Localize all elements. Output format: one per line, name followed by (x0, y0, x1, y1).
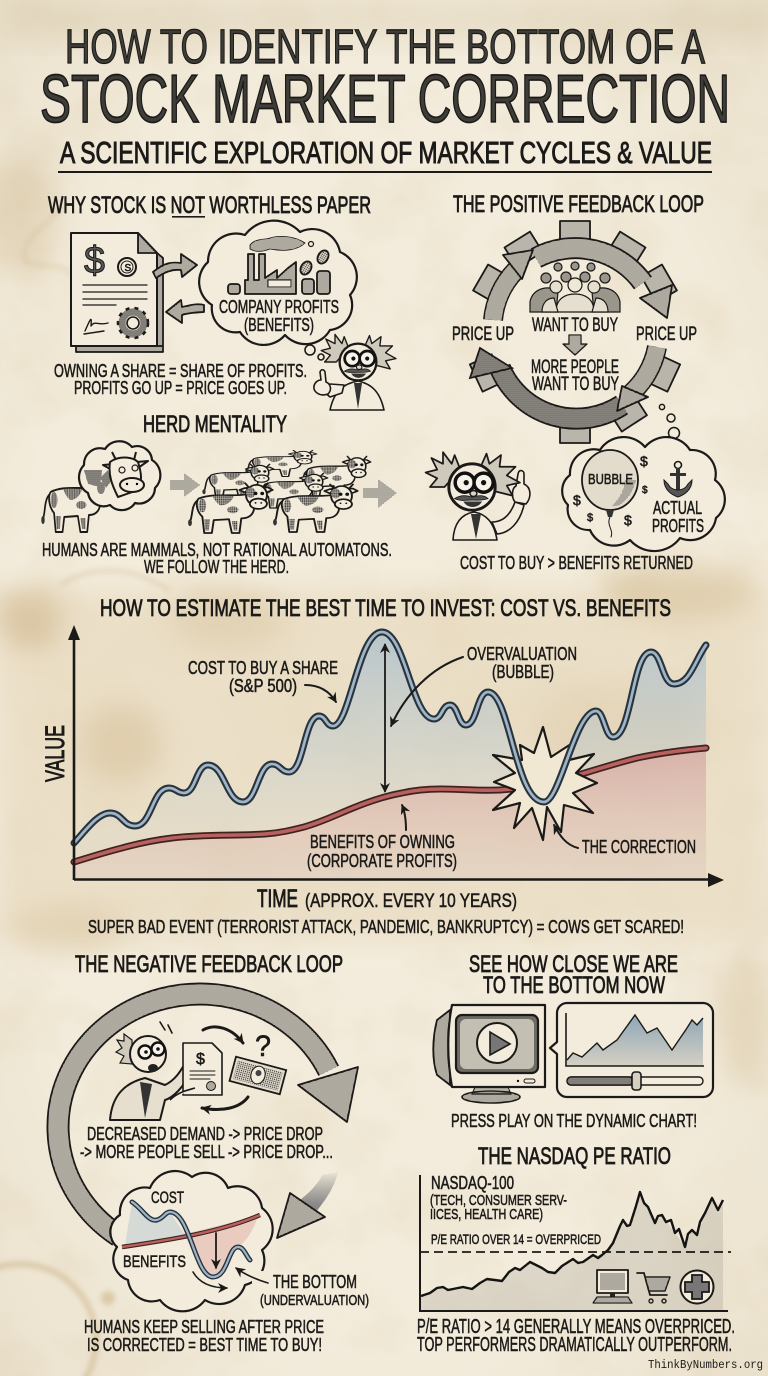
callout: benefits of owning: (CORPORATE PROFITS) (307, 851, 457, 871)
chart axes (420, 1175, 728, 1311)
big loop arrow (58, 994, 358, 1236)
icon: stock certificate: S (124, 263, 132, 274)
cloud: the bottom chart (110, 1171, 273, 1311)
chart labels: (TECH, CONSUMER SERV- (430, 1192, 567, 1209)
callout: the bottom: (UNDERVALUATION) (260, 1292, 369, 1309)
heading: HERD MENTALITY (143, 411, 287, 438)
dollar signs: $ (640, 453, 648, 469)
label: more people want to buy: WANT TO BUY (532, 374, 619, 395)
callout: cost to buy: (S&P 500) (229, 676, 297, 696)
icon: medical cross (680, 1270, 714, 1304)
dollar signs: $ (573, 492, 581, 508)
label: benefits: BENEFITS (123, 1252, 186, 1271)
axis label: time (257, 885, 517, 913)
chart labels: P/E RATIO OVER 14 = OVERPRICED (431, 1231, 601, 1247)
thought bubbles (659, 404, 680, 438)
callout: overvaluation (391, 644, 577, 726)
label: want to buy: WANT TO BUY (532, 315, 618, 336)
icon: worried scientist with certificate (110, 1022, 222, 1120)
dollar signs: $ (587, 512, 593, 524)
dollar signs: $ (624, 512, 632, 528)
label (219, 296, 339, 335)
mini line: cost (132, 1202, 250, 1277)
dollar signs: $ (642, 485, 648, 496)
icon: shopping cart (637, 1273, 670, 1303)
callout: benefits of owning (307, 805, 457, 871)
icon: monitor with play button (433, 1005, 545, 1103)
label: more people want to buy (531, 357, 619, 395)
label: actual profits: ACTUAL (653, 498, 702, 518)
label: actual profits (652, 498, 704, 536)
panel: cost vs benefits chart (40, 595, 724, 937)
text block: keep selling: HUMANS KEEP SELLING AFTER PRICE (84, 1317, 324, 1337)
line: pe ratio (421, 1192, 723, 1296)
callout: overvaluation: OVERVALUATION (467, 644, 577, 664)
text block: decreased demand: DECREASED DEMAND -> PRICE DROP (87, 1124, 323, 1144)
heading: SEE HOW CLOSE WE ARE (469, 951, 678, 978)
callout: the correction: THE CORRECTION (582, 837, 696, 857)
callout: the bottom (236, 1268, 370, 1309)
line: cost to buy (74, 632, 706, 843)
callout: cost to buy: COST TO BUY A SHARE (188, 658, 338, 678)
arrow: dollar back (202, 1097, 248, 1110)
text block (42, 540, 392, 577)
icon: dollar bill (230, 1057, 286, 1094)
dollar signs (573, 453, 648, 528)
panel: herd mentality (41, 411, 397, 577)
line: benefits (74, 748, 706, 862)
axis label: time: TIME (257, 885, 298, 913)
area: benefits fill (74, 748, 706, 880)
callout: overvaluation: (BUBBLE) (492, 662, 554, 682)
arrow (563, 335, 587, 355)
text block (54, 361, 307, 398)
icon: scientist pointing (314, 334, 396, 410)
thought bubbles (305, 345, 324, 360)
text block (417, 1316, 735, 1356)
main title (40, 21, 730, 137)
heading (469, 951, 678, 999)
icon: crowd (530, 262, 620, 312)
icon: correction starburst (493, 727, 597, 840)
heading: WHY STOCK IS NOT WORTHLESS PAPER (48, 192, 371, 219)
icon: anchor (664, 462, 692, 497)
panel: see how close we are (433, 951, 713, 1131)
icon: stock certificate (71, 233, 163, 352)
axis label: value: VALUE (40, 725, 70, 782)
callout: the correction (554, 825, 696, 857)
label: more people want to buy: MORE PEOPLE (531, 357, 619, 378)
cloud: bubble vs actual profits (562, 437, 725, 551)
text block: PROFITS GO UP = PRICE GOES UP. (74, 378, 287, 398)
curved arrow (193, 1272, 227, 1288)
heading: THE NASDAQ PE RATIO (478, 1143, 671, 1170)
text block: decreased demand (80, 1124, 333, 1162)
gear and loop arrows (470, 221, 680, 443)
icon: balloon: BUBBLE (588, 471, 633, 488)
icon: computer (593, 1270, 632, 1303)
chart labels (430, 1173, 601, 1247)
area chart (421, 1192, 723, 1311)
panel: nasdaq pe ratio (417, 1143, 735, 1356)
icon: herd of cows (188, 450, 371, 533)
area: cost fill (74, 632, 706, 880)
arrow (363, 479, 397, 508)
icon: stock certificate: $ (84, 240, 105, 282)
text block: WE FOLLOW THE HERD. (144, 557, 289, 577)
chart labels: IICES, HEALTH CARE) (430, 1206, 543, 1223)
panel: dynamic chart (550, 1003, 713, 1097)
label: price up left: PRICE UP (452, 324, 514, 345)
down arrow (215, 1233, 217, 1268)
icon: coins (228, 242, 331, 294)
panel: negative feedback loop (58, 951, 370, 1355)
panel: why stock is not worthless paper (48, 192, 396, 410)
icon: question mark: ? (255, 1030, 271, 1063)
axis label: time: (APPROX. EVERY 10 YEARS) (305, 891, 517, 912)
text block: HUMANS ARE MAMMALS, NOT RATIONAL AUTOMATONS. (42, 540, 392, 560)
icon: factory (245, 236, 305, 294)
text block: keep selling: IS CORRECTED = BEST TIME TO BUY! (87, 1335, 322, 1355)
callout: cost to buy (188, 658, 338, 702)
second arrow (277, 1172, 338, 1238)
callout: benefits of owning: BENEFITS OF OWNING (310, 832, 455, 852)
panel: positive feedback loop (426, 191, 725, 573)
label: COMPANY PROFITS (219, 296, 339, 317)
text block: keep selling (84, 1317, 324, 1355)
text block: decreased demand: -> MORE PEOPLE SELL -> PRICE DROP... (80, 1142, 333, 1162)
heading: THE NEGATIVE FEEDBACK LOOP (75, 951, 343, 978)
cloud: company profits (199, 221, 357, 345)
arrow: back to certificate (166, 300, 204, 323)
icon: balloon (582, 450, 638, 537)
arrow: certificate to dollar (203, 1027, 243, 1043)
mini line: benefits (122, 1215, 260, 1247)
heading: TO THE BOTTOM NOW (483, 972, 665, 999)
chart labels: NASDAQ-100 (431, 1173, 514, 1193)
arrow (170, 473, 200, 497)
icon: cow thinking (41, 441, 160, 532)
label: (BENEFITS) (244, 314, 314, 335)
label: cost: COST (151, 1188, 184, 1207)
chart axes (68, 625, 724, 887)
threshold line (420, 1251, 731, 1253)
arrow: to profits (153, 254, 197, 278)
callout: the bottom: THE BOTTOM (273, 1272, 357, 1292)
icon: scientist pointing (426, 452, 530, 540)
label: price up right: PRICE UP (636, 324, 697, 345)
mini fills (125, 1202, 258, 1277)
label: actual profits: PROFITS (652, 516, 704, 536)
text block: OWNING A SHARE = SHARE OF PROFITS. (54, 361, 307, 381)
double arrow: overvaluation gap (384, 644, 386, 792)
icon: worried scientist with certificate: $ (196, 1051, 205, 1068)
